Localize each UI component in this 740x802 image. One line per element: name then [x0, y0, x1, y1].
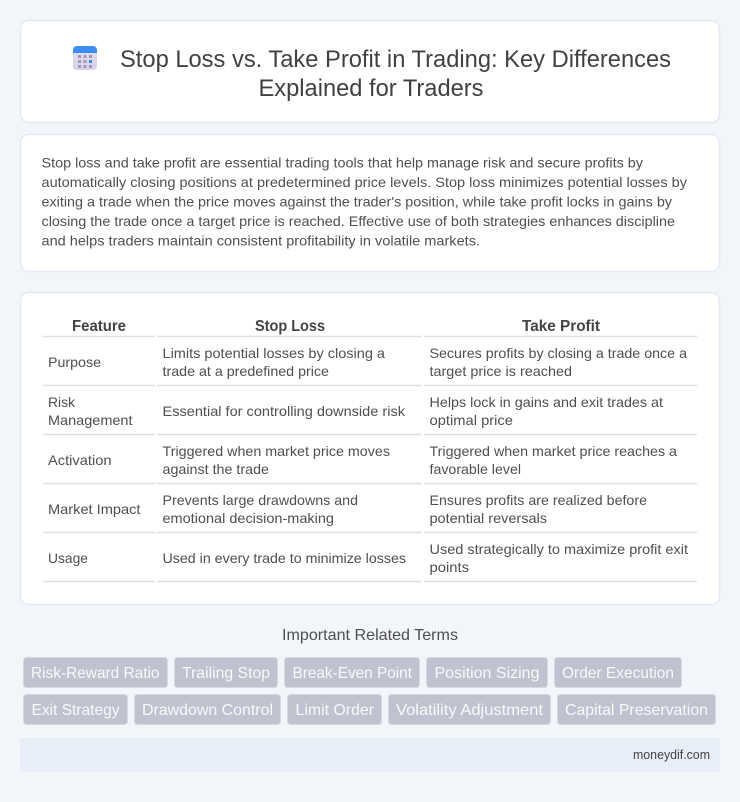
tag group: related terms [24, 658, 716, 724]
icon: calendar [73, 46, 97, 70]
tag: Risk-Reward Ratio: Risk-Reward Ratio [31, 665, 160, 682]
tag: Volatility Adjustment [388, 694, 550, 724]
table row: Usage: Used strategically to maximize profit exit [430, 541, 688, 557]
table row: Purpose: trade at a predefined price [162, 363, 329, 379]
table row: Market Impact: Market Impact [48, 501, 141, 517]
title [120, 46, 671, 102]
title: Stop Loss vs. Take Profit in Trading: Key Differences [120, 46, 671, 73]
table row: Risk Management: Helps lock in gains and exit trades at [430, 394, 663, 410]
tag: Position Sizing [426, 658, 548, 688]
table row: Activation [43, 443, 697, 484]
tag: Break-Even Point [284, 658, 420, 688]
text block: introduction paragraph: exiting a trade when the price moves against the trader's position, while take profit locks in gains by [42, 194, 672, 210]
table row: Market Impact: Prevents large drawdowns and [162, 492, 358, 508]
tag: Limit Order: Limit Order [296, 702, 375, 719]
table row: Risk Management: Management [48, 412, 133, 428]
table row: Market Impact: emotional decision-making [162, 510, 334, 526]
tag: Risk-Reward Ratio [24, 658, 168, 688]
text block: introduction paragraph: automatically closing positions at predetermined price levels. Stop loss minimizes potential losses by [42, 174, 687, 190]
table row: Usage: Used in every trade to minimize losses [162, 550, 406, 566]
table header row: Take Profit [522, 318, 601, 335]
tag: Exit Strategy [24, 694, 128, 724]
tag: Capital Preservation: Capital Preservation [565, 702, 708, 719]
table row: Purpose: Purpose [48, 354, 101, 370]
text block: introduction paragraph: Stop loss and take profit are essential trading tools that help manage risk and secure profits by [42, 154, 643, 170]
tag: Volatility Adjustment: Volatility Adjustment [396, 702, 544, 719]
table row: Risk Management: optimal price [430, 412, 513, 428]
table row: Activation: Triggered when market price reaches a [430, 443, 677, 459]
tag: Drawdown Control: Drawdown Control [142, 702, 273, 719]
table row: Activation: Activation [48, 452, 112, 468]
tag: Exit Strategy: Exit Strategy [32, 702, 120, 719]
table row: Risk Management: Risk [48, 394, 76, 410]
table header row: Stop Loss [255, 318, 325, 335]
table row: Purpose [43, 345, 697, 386]
table header row: Feature [72, 318, 126, 335]
table row: Activation: against the trade [162, 461, 269, 477]
tag: Limit Order [288, 694, 382, 724]
table row: Activation: favorable level [430, 461, 521, 477]
tag: Order Execution: Order Execution [562, 665, 674, 682]
panel: title header [20, 20, 720, 122]
table row: Activation: Triggered when market price moves [162, 443, 390, 459]
tag: Trailing Stop [174, 658, 278, 688]
tag: Drawdown Control [134, 694, 280, 724]
table row: Purpose: Secures profits by closing a trade once a [430, 345, 687, 361]
text block: introduction paragraph [42, 154, 687, 248]
footer source text: moneydif.com [633, 748, 710, 762]
table row: Usage [43, 541, 697, 582]
table row: Market Impact: Ensures profits are realized before [430, 492, 647, 508]
text block: introduction paragraph: and helps traders maintain consistent profitability in volatile markets. [42, 232, 480, 248]
tag: Capital Preservation [558, 694, 716, 724]
title: Explained for Traders [258, 75, 484, 102]
table row: Risk Management [43, 394, 697, 434]
tag: Trailing Stop: Trailing Stop [182, 665, 270, 682]
text block: introduction paragraph: closing the trade once a target price is reached. Effective use of both strategies enhances discipline [42, 213, 675, 229]
table row: Market Impact [43, 492, 697, 532]
footer [20, 738, 720, 772]
tag: Order Execution [554, 658, 682, 688]
tag: Break-Even Point: Break-Even Point [292, 665, 413, 682]
table row: Usage: points [430, 559, 469, 575]
heading: important related terms: Important Related Terms [282, 627, 458, 644]
panel: comparison table [20, 292, 720, 604]
tag: Position Sizing: Position Sizing [434, 665, 540, 682]
table header row [43, 318, 697, 336]
panel: introduction [20, 134, 720, 272]
table row: Purpose: target price is reached [430, 363, 572, 379]
table row: Risk Management: Essential for controlling downside risk [162, 403, 406, 419]
table row: Usage: Usage [48, 550, 88, 566]
table row: Purpose: Limits potential losses by closing a [162, 345, 385, 361]
table row: Market Impact: potential reversals [430, 510, 547, 526]
